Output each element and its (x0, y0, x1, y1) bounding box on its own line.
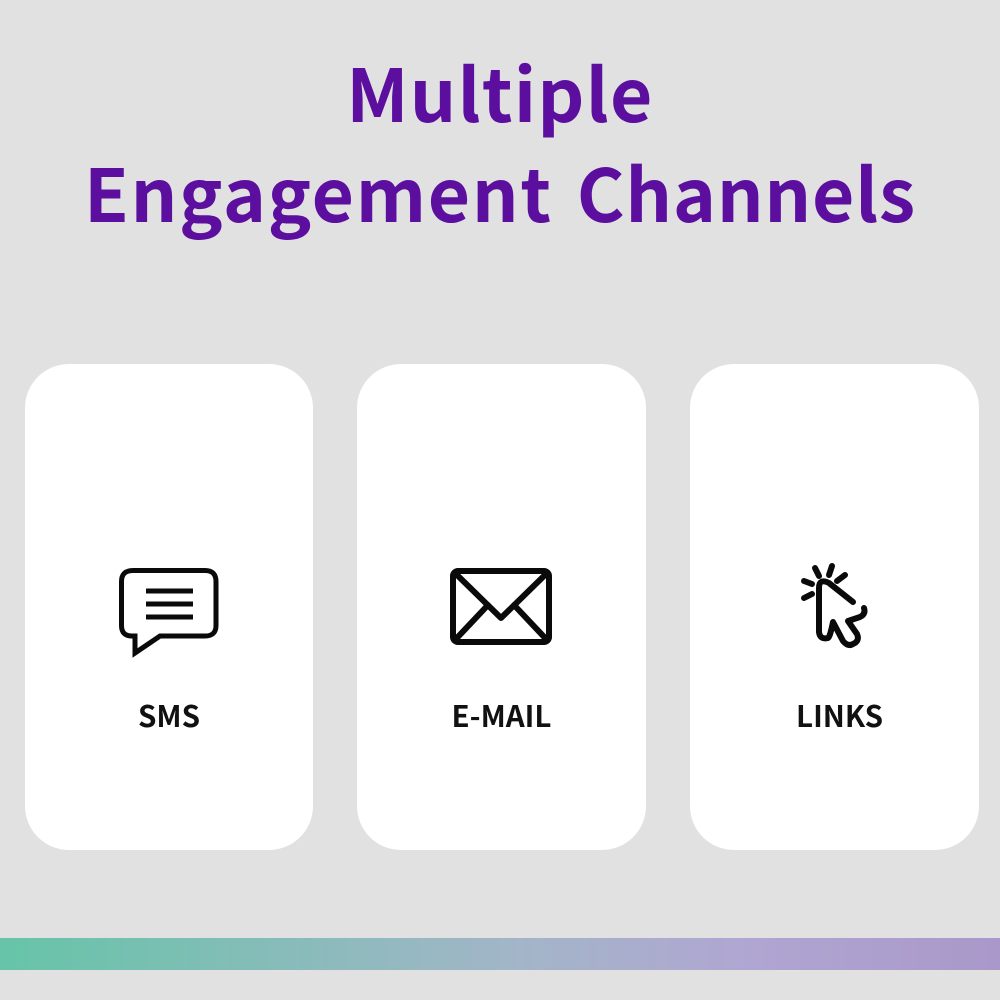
label: SMS: SMS (138, 694, 200, 736)
panel: Links card (690, 364, 979, 850)
gradient bar (0, 938, 1000, 970)
panel: E-mail card (357, 364, 646, 850)
label: LINKS: LINKS (796, 694, 883, 736)
title line 2: Engagement Channels (84, 138, 916, 244)
title line 1: Multiple (346, 38, 654, 144)
label: E-MAIL: E-MAIL (452, 694, 551, 736)
title (84, 38, 916, 244)
panel: SMS card (25, 364, 313, 850)
